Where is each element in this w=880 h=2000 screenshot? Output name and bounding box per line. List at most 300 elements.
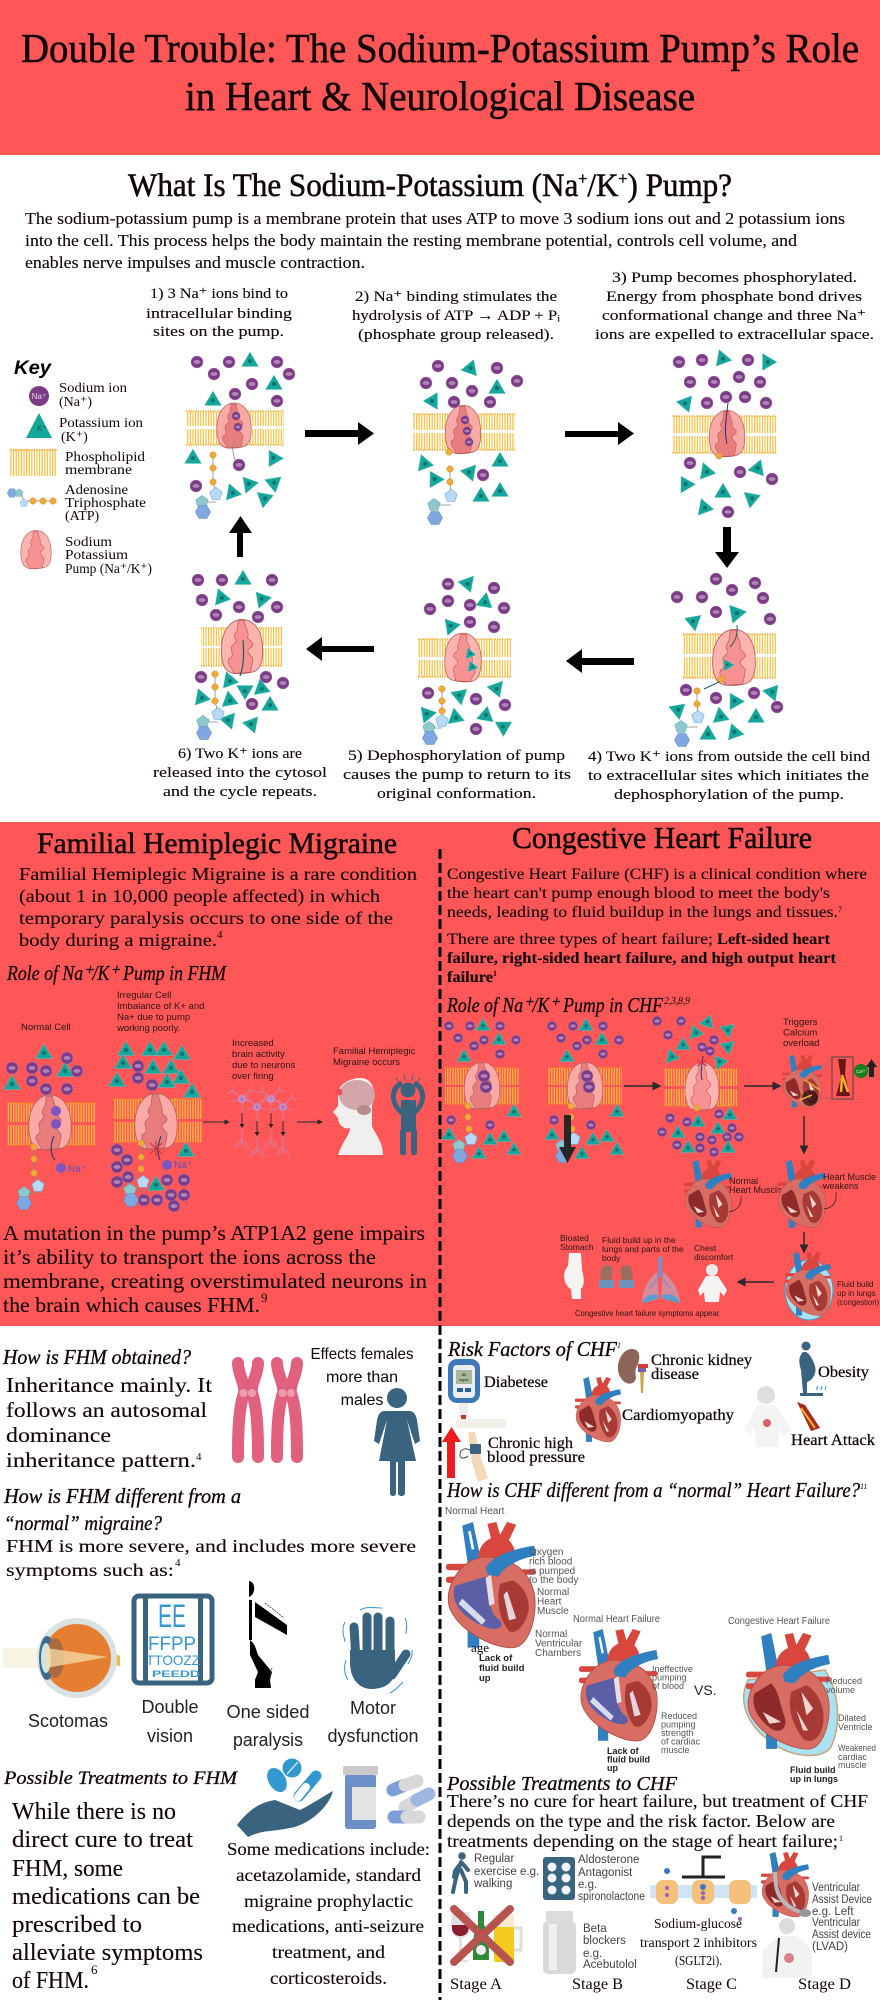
label: beta blockers: Acebutolol <box>583 1959 637 1971</box>
label: increased activity: brain activity <box>232 1049 285 1060</box>
key: phospholipid membrane: membrane <box>65 463 132 478</box>
caption: step 4 <box>588 749 871 803</box>
paragraph: more severe: 4 <box>175 1557 181 1569</box>
heading: what is the pump: ) Pump? <box>627 168 732 204</box>
diagram: normal heart failure: up <box>607 1763 618 1773</box>
risk: high blood pressure: Chronic high <box>488 1435 573 1452</box>
caption: step 5: causes the pump to return to its <box>343 767 571 783</box>
caption: step 3: ions are expelled to extracellular space. <box>595 327 874 343</box>
label: increased activity: Increased <box>232 1038 274 1049</box>
FHM intro paragraph: 4 <box>217 929 223 941</box>
title: in Heart & Neurological Disease <box>185 73 695 119</box>
FHM mutation paragraph: 9 <box>261 1290 268 1305</box>
caption: step 1: sites on the pump. <box>153 324 284 340</box>
label: stage A: Stage A <box>450 1976 503 1993</box>
CHF types paragraph: failure <box>447 969 493 986</box>
caption: step 3: Energy from phosphate bond drives <box>606 289 862 305</box>
icon: double vision chart: EE <box>158 1598 186 1634</box>
icon: normal heart muscle: Normal <box>729 1176 758 1186</box>
symptoms <box>560 1233 734 1318</box>
icon: walking person <box>453 1852 468 1892</box>
risk: cardiomyopathy <box>575 1377 734 1442</box>
FHM intro paragraph: (about 1 in 10,000 people affected) in which <box>19 886 380 906</box>
icon: LVAD heart <box>761 1852 811 1917</box>
risk: diabetes meter: Diabetese <box>484 1374 548 1391</box>
diagram: normal heart: rich blood <box>529 1556 572 1568</box>
icon: chest discomfort <box>694 1243 734 1302</box>
paragraph: inheritance: dominance <box>6 1423 111 1447</box>
paragraph: FHM treatments: alleviate symptoms <box>12 1940 203 1966</box>
arrow: step 2 to 3 <box>565 422 634 445</box>
paragraph: some medications: treatment, and <box>272 1942 385 1962</box>
label: stage D: Stage D <box>798 1976 851 1993</box>
caption: step 3: conformational change and three Na⁺ <box>602 308 866 324</box>
icon: person with headache <box>393 1075 423 1155</box>
icon: chromosomes <box>238 1363 297 1457</box>
diagram: irregular cell: Na⁺ <box>174 1160 192 1171</box>
icon: tablets <box>543 1857 575 1900</box>
diagram: congestive heart failure: Fluid build <box>790 1765 836 1775</box>
paragraph: inheritance <box>6 1373 212 1472</box>
panel: title banner <box>0 0 880 155</box>
icon: heart with calcium overload <box>782 1055 877 1107</box>
diagram: normal heart: Ventricular <box>535 1638 583 1650</box>
FHM mutation paragraph: A mutation in the pump’s ATP1A2 gene impairs <box>3 1221 425 1245</box>
label: aldosterone antagonist: Aldosterone <box>578 1854 639 1866</box>
icon: weakened heart muscle <box>777 1160 876 1228</box>
CHF intro paragraph: Congestive Heart Failure (CHF) is a clinical condition where <box>447 866 867 883</box>
label: FHM occurs: Migraine occurs <box>333 1057 400 1068</box>
label: calcium overload: Calcium <box>783 1028 817 1038</box>
stage D <box>761 1852 872 1993</box>
icon: female <box>374 1388 420 1496</box>
icon: motor dysfunction hand: dysfunction <box>328 1726 418 1746</box>
arrow: red up <box>442 1427 461 1478</box>
label: irregular cell: Na+ due to pump <box>117 1012 190 1023</box>
CHF types paragraph: There are three types of heart failure; <box>447 931 713 948</box>
icon: bloated stomach <box>564 1253 584 1299</box>
key: potassium ion: Potassium ion <box>59 416 143 431</box>
label: effects females: males <box>341 1392 383 1409</box>
subheading: CHF treatments: Possible Treatments to CHF <box>446 1773 678 1795</box>
label: exercise: Regular <box>474 1853 514 1865</box>
diagram: normal heart failure: pumping <box>661 1720 696 1730</box>
icon: bottle <box>543 1911 576 1974</box>
paragraph: more severe <box>6 1536 416 1580</box>
icon: congested heart: Fluid build <box>837 1280 873 1289</box>
label: exercise <box>473 1853 539 1890</box>
label: LVAD: e.g. Left <box>812 1906 854 1918</box>
label: irregular cell: Imbalance of K+ and <box>117 1001 204 1012</box>
label: beta blockers: Beta <box>583 1923 607 1935</box>
label: increased activity: over firing <box>232 1071 274 1082</box>
paragraph: more severe: FHM is more severe, and includes more severe <box>6 1536 416 1556</box>
label: effects females: Effects females <box>310 1346 414 1363</box>
caption: step 3: 3) Pump becomes phosphorylated. <box>612 270 857 286</box>
icon: neurons <box>228 1085 296 1157</box>
paragraph: more severe: symptoms such as: <box>6 1560 174 1580</box>
diagram: step 3 cell <box>672 350 778 518</box>
label: SGLT2i: (SGLT2i). <box>675 1954 722 1969</box>
diagram: step 1 cell <box>184 352 295 518</box>
diagram: normal heart: Normal <box>535 1629 567 1640</box>
paragraph: FHM treatments: 6 <box>91 1962 98 1977</box>
paragraph: FHM treatments: FHM, some <box>12 1856 123 1882</box>
diagram: normal heart failure: muscle <box>661 1745 690 1755</box>
diagram: normal heart failure: Reduced <box>661 1711 697 1721</box>
label: aldosterone antagonist: e.g. <box>578 1879 597 1891</box>
icon: eye scotomas <box>3 1618 120 1731</box>
diagram: normal heart: Heart <box>537 1596 562 1608</box>
key: potassium ion: (K⁺) <box>61 430 88 445</box>
diagram: normal heart failure: of cardiac <box>661 1736 701 1746</box>
label: irregular cell: working poorly. <box>116 1023 180 1034</box>
paragraph: FHM treatments: direct cure to treat <box>12 1827 193 1853</box>
arrow: big down arrow <box>559 1115 576 1163</box>
diagram: normal heart: Muscle <box>537 1606 569 1617</box>
CHF intro paragraph <box>447 866 867 921</box>
caption: step 5 <box>343 748 571 802</box>
label: LVAD: (LVAD) <box>812 1941 848 1953</box>
arrow: step 1 to 2 <box>305 422 374 445</box>
diagram: normal heart: Normal <box>537 1587 569 1598</box>
caption: step 5: original conformation. <box>377 786 536 802</box>
FHM mutation paragraph <box>3 1221 428 1317</box>
panel: congestive heart failure <box>442 820 879 1320</box>
heading: what is the pump: + <box>578 169 587 188</box>
paragraph: some medications: migraine prophylactic <box>244 1891 413 1911</box>
label: beta blockers: blockers <box>583 1935 626 1947</box>
icon: head with brain <box>333 1078 383 1155</box>
caption: step 5: 5) Dephosphorylation of pump <box>348 748 565 764</box>
diagram: normal heart failure: Ineffective <box>652 1664 693 1674</box>
FHM intro paragraph: body during a migraine. <box>19 930 217 950</box>
label: LVAD: Assist device <box>812 1929 871 1941</box>
paragraph: CHF treatments: There’s no cure for heart failure, but treatment of CHF <box>447 1791 868 1811</box>
key: pump: Sodium <box>65 535 112 550</box>
label: stage C: Stage C <box>686 1976 737 1993</box>
diagram: normal heart failure: Normal Heart Failure <box>573 1614 660 1625</box>
icon: congested heart: (congestion) <box>837 1298 879 1307</box>
diagram: normal heart failure: Lack of <box>607 1746 640 1756</box>
diagram: normal cell: Na⁺ <box>68 1164 86 1175</box>
caption: step 3 <box>595 270 874 343</box>
key: ATP: Triphosphate <box>65 496 146 511</box>
label: increased activity: due to neurons <box>232 1060 296 1071</box>
risk: heart attack: Heart Attack <box>791 1432 875 1449</box>
key: ATP <box>7 483 146 524</box>
icon: double vision chart: Double <box>141 1697 199 1717</box>
arrow: step 6 to 1 <box>229 516 252 557</box>
label: irregular cell <box>116 990 204 1034</box>
subheading: how FHM different: How is FHM different from a <box>3 1484 241 1508</box>
caption: step 4: to extracellular sites which initiates the <box>588 768 869 784</box>
risk: diabetes meter <box>448 1359 548 1428</box>
label: exercise: exercise e.g. <box>474 1866 539 1878</box>
diagram: normal heart: Oxygen <box>529 1547 563 1558</box>
paragraph: CHF treatments: depends on the type and the risk factor. Below are <box>447 1811 835 1831</box>
labels: symptoms: Bloated <box>560 1233 589 1243</box>
intro paragraph: enables nerve impulses and muscle contraction. <box>25 253 365 272</box>
labels: symptoms <box>560 1233 721 1318</box>
diagram: CHF cell C <box>652 1012 744 1157</box>
key: ATP: Adenosine <box>65 483 128 498</box>
icon: kidneys <box>599 1265 634 1288</box>
diagram: congestive heart failure: Dilated <box>838 1713 866 1723</box>
diagram: normal heart: fluid build <box>479 1663 525 1674</box>
risk: obesity: Obesity <box>818 1364 869 1381</box>
label: normal cell: Normal Cell <box>21 1022 71 1033</box>
icon: congested heart: up in lungs <box>837 1289 876 1298</box>
title <box>21 25 859 119</box>
arrow: to symptoms <box>738 1281 774 1283</box>
label: effects females <box>310 1346 414 1409</box>
risk: chronic kidney disease: disease <box>651 1366 699 1383</box>
subheading: risk factors: 1 <box>617 1341 621 1350</box>
heading: CHF: Congestive Heart Failure <box>512 820 812 855</box>
CHF intro paragraph: 7 <box>838 905 842 914</box>
subheading: risk factors: Risk Factors of CHF <box>447 1337 617 1361</box>
diagram: normal heart: Normal Heart <box>445 1506 505 1517</box>
label: calcium overload: Triggers <box>783 1017 818 1028</box>
CHF intro paragraph: the heart can't pump enough blood to meet the body's <box>447 885 830 902</box>
paragraph: FHM treatments: While there is no <box>12 1799 176 1825</box>
arrow: step 5 to 6 <box>306 637 374 661</box>
icon: normal heart muscle: Heart Muscle <box>729 1185 782 1195</box>
icon: pill bottle <box>343 1766 378 1829</box>
risk: high blood pressure: blood pressure <box>487 1449 585 1466</box>
icon: capsules <box>393 1781 429 1817</box>
FHM mutation paragraph: it’s ability to transport the ions across the <box>3 1245 376 1269</box>
subheading: FHM treatments: Possible Treatments to FHM <box>3 1768 238 1789</box>
risk: chronic kidney disease <box>618 1349 752 1393</box>
key heading: Key <box>14 358 53 379</box>
label: beta blockers <box>583 1923 637 1971</box>
key: pump: Pump (Na⁺/K⁺) <box>65 562 152 577</box>
key: sodium ion <box>29 381 127 410</box>
heading: what is the pump: /K <box>587 168 619 204</box>
heading: FHM: Familial Hemiplegic Migraine <box>37 827 397 860</box>
diagram: normal heart: Chambers <box>535 1648 581 1659</box>
label: aldosterone antagonist: spironolactone <box>578 1891 645 1903</box>
risk: chronic kidney disease: Chronic kidney <box>651 1352 752 1369</box>
subheading: how FHM obtained: How is FHM obtained? <box>2 1345 191 1369</box>
icon: chest discomfort: discomfort <box>694 1252 734 1262</box>
key: ATP: (ATP) <box>65 509 100 524</box>
paragraph: CHF treatments: treatments depending on the stage of heart failure; <box>447 1831 838 1851</box>
key: pump <box>21 530 152 577</box>
paragraph: FHM treatments <box>12 1799 203 1994</box>
intro paragraph <box>25 209 845 272</box>
caption: step 2 <box>352 289 561 343</box>
caption: step 1 <box>146 286 293 340</box>
risk: diabetes meter: mg/dL <box>459 1378 469 1382</box>
panel: red disease background <box>0 822 880 1326</box>
FHM mutation paragraph: membrane, creating overstimulated neurons in <box>3 1269 428 1293</box>
diagram: CHF cell B <box>545 1018 624 1163</box>
key <box>7 358 152 577</box>
intro paragraph: into the cell. This process helps the body maintain the resting membrane potential, controls cell volume, and <box>25 231 798 250</box>
labels: symptoms: Fluid build up in the <box>602 1235 676 1245</box>
paragraph: some medications: corticosteroids. <box>270 1968 387 1988</box>
diagram: normal heart <box>445 1506 583 1684</box>
paragraph: FHM treatments: of FHM. <box>12 1968 89 1994</box>
paragraph: inheritance: inheritance pattern. <box>6 1448 196 1472</box>
diagram: congestive heart failure: Congestive Heart Failure <box>728 1616 830 1627</box>
icon: normal heart muscle <box>684 1160 782 1228</box>
icon: one sided paralysis: One sided <box>226 1702 310 1722</box>
subheading: role in FHM: Role of Na⁺/K⁺ Pump in FHM <box>6 961 227 985</box>
risk: diabetes meter: 80 <box>462 1372 467 1377</box>
arrow: cell C to heart <box>744 1085 780 1087</box>
label: effects females: more than <box>326 1369 398 1386</box>
diagram: congestive heart failure: up in lungs <box>790 1774 838 1784</box>
arrow: step 3 to 4 <box>715 527 739 568</box>
diagram: congestive heart failure: muscle <box>838 1760 867 1770</box>
paragraph: CHF treatments: 1 <box>839 1834 843 1843</box>
diagram: normal heart: Lack of <box>479 1653 513 1664</box>
diagram: normal heart: up <box>479 1673 491 1684</box>
risk: heart attack <box>744 1386 875 1449</box>
paragraph: some medications: medications, anti-seizure <box>232 1916 424 1936</box>
paragraph: inheritance: Inheritance mainly. It <box>6 1373 212 1397</box>
icon: hand with pills <box>237 1758 333 1837</box>
label: aldosterone antagonist <box>578 1854 645 1903</box>
arrow: cell B to C <box>624 1085 660 1087</box>
label: LVAD: Assist Device <box>812 1894 872 1906</box>
arrow: to weakened heart <box>803 1116 805 1153</box>
icon: double vision chart: PEEDD <box>152 1669 201 1679</box>
labels: symptoms: lungs and parts of the <box>602 1244 684 1254</box>
label: beta blockers: e.g. <box>583 1948 602 1960</box>
paragraph: FHM treatments: medications can be <box>12 1884 200 1910</box>
key: sodium ion: Na⁺ <box>32 392 46 401</box>
FHM intro paragraph: Familial Hemiplegic Migraine is a rare condition <box>19 864 417 884</box>
label: calcium overload: overload <box>783 1038 819 1049</box>
caption: step 2: hydrolysis of ATP → ADP + Pᵢ <box>352 308 561 324</box>
subheading: role in CHF: 2,3,8,9 <box>664 996 690 1007</box>
label: aldosterone antagonist: Antagonist <box>578 1867 633 1879</box>
subheading: how FHM different <box>3 1484 241 1535</box>
label: FHM occurs: Familial Hemiplegic <box>333 1046 416 1057</box>
icon: eye scotomas: Scotomas <box>28 1711 108 1731</box>
label: increased activity <box>232 1038 296 1082</box>
label: FHM occurs <box>333 1046 416 1068</box>
subheading: role in CHF: Role of Na⁺/K⁺ Pump in CHF <box>446 993 663 1017</box>
diagram: congestive heart failure: volume <box>826 1685 855 1695</box>
paragraph: some medications <box>227 1839 430 1988</box>
labels: symptoms: Stomach <box>560 1242 594 1252</box>
diagram: normal heart: age <box>471 1640 489 1655</box>
label: LVAD: Ventricular <box>812 1882 860 1894</box>
panel: FHM details <box>2 1345 430 1994</box>
icon: one sided paralysis <box>226 1581 310 1750</box>
diagram: irregular cell <box>108 1041 202 1212</box>
icon: chest discomfort: Chest <box>694 1243 717 1253</box>
diagram: SGLT2 inhibitor <box>650 1857 757 1921</box>
CHF intro paragraph: needs, leading to fluid buildup in the lungs and tissues. <box>447 904 838 921</box>
caption: step 2: (phosphate group released). <box>358 327 554 343</box>
intro paragraph: The sodium-potassium pump is a membrane protein that uses ATP to move 3 sodium ions out and 2 potassium ions <box>25 209 845 228</box>
diagram: normal cell <box>4 1044 96 1210</box>
stage C <box>640 1857 757 1993</box>
caption: step 1: 1) 3 Na⁺ ions bind to <box>150 286 288 302</box>
icon: heart with calcium overload: Ca²⁺ <box>856 1069 866 1074</box>
diagram: normal heart failure: of blood <box>652 1681 684 1691</box>
diagram: congestive heart failure: Ventricle <box>838 1722 873 1732</box>
caption: step 2: 2) Na⁺ binding stimulates the <box>355 289 557 305</box>
panel: what is the pump <box>7 168 874 803</box>
icon: weakened heart muscle: Heart Muscle <box>823 1172 876 1182</box>
caption: step 6: 6) Two K⁺ ions are <box>178 746 302 762</box>
icon: double vision chart: vision <box>147 1726 193 1746</box>
caption: step 6: released into the cytosol <box>153 765 327 781</box>
CHF types paragraph: 1 <box>493 969 497 978</box>
FHM intro paragraph <box>19 864 417 950</box>
heading: what is the pump: What Is The Sodium-Potassium (Na <box>128 168 606 204</box>
caption: step 4: dephosphorylation of the pump. <box>614 787 844 803</box>
icon: double vision chart: TTOOZZ <box>146 1652 200 1668</box>
label: calcium overload <box>783 1017 819 1049</box>
label: irregular cell: Irregular Cell <box>117 990 171 1001</box>
label: LVAD: Ventricular <box>812 1917 860 1929</box>
CHF types paragraph: failure, right-sided heart failure, and high output heart <box>447 950 837 967</box>
key: potassium ion: K⁺ <box>37 424 47 433</box>
risk: high blood pressure <box>442 1427 585 1482</box>
FHM mutation paragraph: the brain which causes FHM. <box>3 1293 260 1317</box>
label: stage B: Stage B <box>572 1976 623 1993</box>
risk: obesity <box>799 1342 869 1396</box>
heading: what is the pump: + <box>618 169 627 188</box>
diagram: normal heart failure: pumping <box>652 1672 687 1682</box>
key: sodium ion: (Na⁺) <box>59 395 92 410</box>
diagram: CHF cell A <box>442 1018 521 1162</box>
icon: one sided paralysis: paralysis <box>233 1730 303 1750</box>
subheading: how CHF different: 11 <box>860 1482 867 1491</box>
label: SGLT2i: Sodium-glucose <box>654 1917 742 1932</box>
CHF types paragraph: Left-sided heart <box>717 931 831 948</box>
icon: no alcohol <box>451 1909 521 1962</box>
icon: double vision chart: FFPP <box>148 1634 196 1655</box>
key: pump: Potassium <box>65 548 128 563</box>
diagram: congestive heart failure: Weakened <box>838 1743 876 1753</box>
diagram: congestive heart failure: cardiac <box>838 1752 868 1762</box>
labels: symptoms: Congestive heart failure symptoms appear. <box>575 1309 721 1318</box>
diagram: step 4 cell <box>669 573 785 746</box>
risk: cardiomyopathy: Cardiomyopathy <box>622 1407 734 1424</box>
paragraph: some medications: Some medications include: <box>227 1839 430 1859</box>
paragraph: inheritance: follows an autosomal <box>6 1398 207 1422</box>
diagram: step 2 cell <box>413 357 523 524</box>
diagram: step 5 cell <box>414 576 512 744</box>
labels: symptoms: body <box>602 1253 621 1263</box>
label: SGLT2i <box>640 1917 757 1969</box>
icon: congested heart <box>785 1252 879 1320</box>
paragraph: CHF treatments <box>447 1791 868 1851</box>
icon: double vision chart <box>134 1596 212 1746</box>
arrow: neurons to migraine <box>297 1121 322 1123</box>
label: SGLT2i: transport 2 inhibitors <box>640 1936 757 1951</box>
key: potassium ion <box>26 413 143 445</box>
stage A <box>450 1852 539 1993</box>
icon: lungs <box>642 1257 680 1303</box>
panel: familial hemiplegic migraine <box>3 827 428 1317</box>
diagram: step 6 cell <box>192 570 289 740</box>
paragraph: FHM treatments: prescribed to <box>12 1912 142 1938</box>
divider: dashed centre line <box>438 849 442 2000</box>
caption: step 4: 4) Two K⁺ ions from outside the cell bind <box>588 749 871 765</box>
caption: step 6: and the cycle repeats. <box>163 784 317 800</box>
